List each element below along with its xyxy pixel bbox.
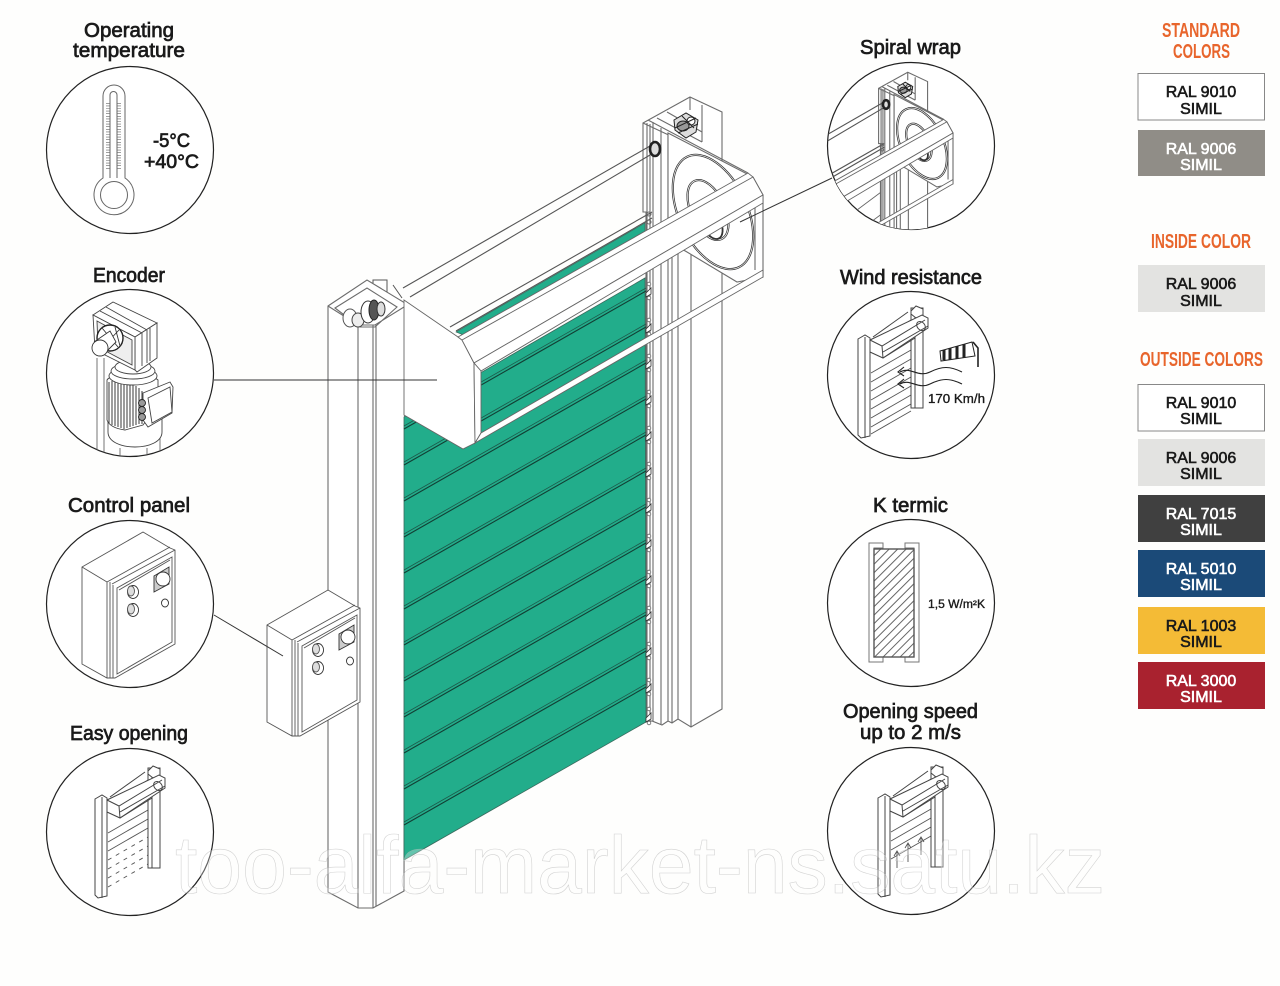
leader line: control panel [214, 615, 283, 656]
panel: encoder [46, 265, 214, 460]
panel: k termic [828, 495, 994, 686]
swatch: RAL 9006: RAL 9006 [1166, 141, 1236, 158]
icon: spiral detail [828, 72, 954, 230]
left guide post [328, 280, 405, 908]
heading: Spiral wrap [860, 37, 961, 59]
icon: windsock [940, 342, 978, 367]
icon: door with slats [858, 306, 928, 438]
swatch: RAL 9010 [1138, 74, 1264, 120]
watermark: too-alfa-market-ns.satu.kz [175, 820, 1105, 911]
heading [73, 20, 185, 62]
panel: standard colors [1138, 20, 1265, 176]
control panel box on door post [267, 590, 360, 736]
swatch: RAL 9010: RAL 9010 [1166, 84, 1236, 101]
swatch: RAL 9006 [1138, 130, 1265, 176]
temperature range: -5°C [153, 131, 190, 152]
door slat lines upper [404, 288, 646, 822]
circle [46, 748, 214, 916]
icon: control box [82, 532, 175, 678]
icon: wind arrows [898, 367, 962, 388]
swatch: RAL 9006: SIMIL [1180, 293, 1222, 310]
hood side panel [404, 300, 475, 449]
swatch: RAL 3000: SIMIL [1180, 689, 1222, 706]
circle [828, 520, 994, 686]
icon: door with dashed slats [95, 766, 165, 898]
swatch: RAL 1003: RAL 1003 [1166, 618, 1236, 635]
thermal value: 1,5 W/m²K [928, 599, 985, 611]
icon: insulated panel section [869, 543, 919, 662]
swatch: RAL 9006: RAL 9006 [1166, 450, 1236, 467]
heading: STANDARD [1162, 20, 1240, 42]
panel: inside color [1138, 231, 1265, 312]
panel: control panel [46, 495, 214, 688]
swatch: RAL 9006: SIMIL [1180, 157, 1222, 174]
swatch: RAL 9006: SIMIL [1180, 466, 1222, 483]
panel: wind resistance [828, 267, 994, 458]
heading: up to 2 m/s [860, 722, 961, 744]
swatch: RAL 1003: SIMIL [1180, 634, 1222, 651]
circle [828, 62, 994, 230]
circle [46, 290, 214, 456]
main door illustration [328, 97, 770, 908]
panel: opening speed [828, 701, 994, 914]
panel: outside colors [1138, 349, 1265, 709]
right guide post and spiral plate [403, 97, 770, 727]
swatch: RAL 3000 [1138, 662, 1265, 709]
heading: Control panel [68, 495, 190, 517]
heading: Opening speed [843, 701, 978, 723]
circle [46, 66, 214, 234]
heading: COLORS [1173, 41, 1230, 63]
panel: operating temperature [46, 20, 214, 234]
green door curtain [404, 278, 646, 860]
hood front rails [458, 173, 763, 443]
swatch: RAL 9010: SIMIL [1180, 101, 1222, 118]
circle [46, 520, 214, 688]
leader line: encoder [214, 379, 437, 381]
heading: Easy opening [70, 723, 188, 745]
rear green curtain strip [456, 223, 645, 336]
icon: door opening [878, 765, 948, 897]
panel: easy opening [46, 723, 214, 916]
heading: K termic [873, 495, 948, 517]
temperature range [144, 131, 199, 173]
door slat lines [404, 291, 646, 825]
heading: Encoder [93, 265, 165, 287]
swatch: RAL 5010 [1138, 550, 1265, 597]
heading: Operating [84, 20, 174, 42]
swatch: RAL 7015 [1138, 495, 1265, 542]
swatch: RAL 3000: RAL 3000 [1166, 673, 1236, 690]
swatch: RAL 5010: SIMIL [1180, 577, 1222, 594]
wind speed: 170 Km/h [928, 391, 985, 406]
swatch: RAL 7015: SIMIL [1180, 522, 1222, 539]
temperature range: +40°C [144, 152, 199, 173]
heading: temperature [73, 40, 185, 62]
swatch: RAL 9006 [1138, 265, 1265, 312]
heading: Wind resistance [840, 267, 982, 289]
swatch: RAL 5010: RAL 5010 [1166, 561, 1236, 578]
circle [828, 292, 994, 458]
icon: motor and encoder [92, 302, 173, 460]
swatch: RAL 9010 [1138, 384, 1264, 431]
swatch: RAL 9010: RAL 9010 [1166, 395, 1236, 412]
heading [1162, 20, 1240, 63]
icon: upward arrows [894, 837, 924, 868]
swatch: RAL 7015: RAL 7015 [1166, 506, 1236, 523]
swatch: RAL 9010: SIMIL [1180, 411, 1222, 428]
slat hinges [646, 282, 651, 725]
icon: thermometer [94, 85, 134, 215]
swatch: RAL 9006: RAL 9006 [1166, 276, 1236, 293]
panel: spiral wrap [826, 38, 996, 230]
circle [828, 748, 994, 914]
swatch: RAL 9006 [1138, 439, 1265, 486]
swatch: RAL 1003 [1138, 607, 1265, 654]
leader line: spiral wrap [740, 178, 832, 222]
heading [843, 701, 978, 744]
